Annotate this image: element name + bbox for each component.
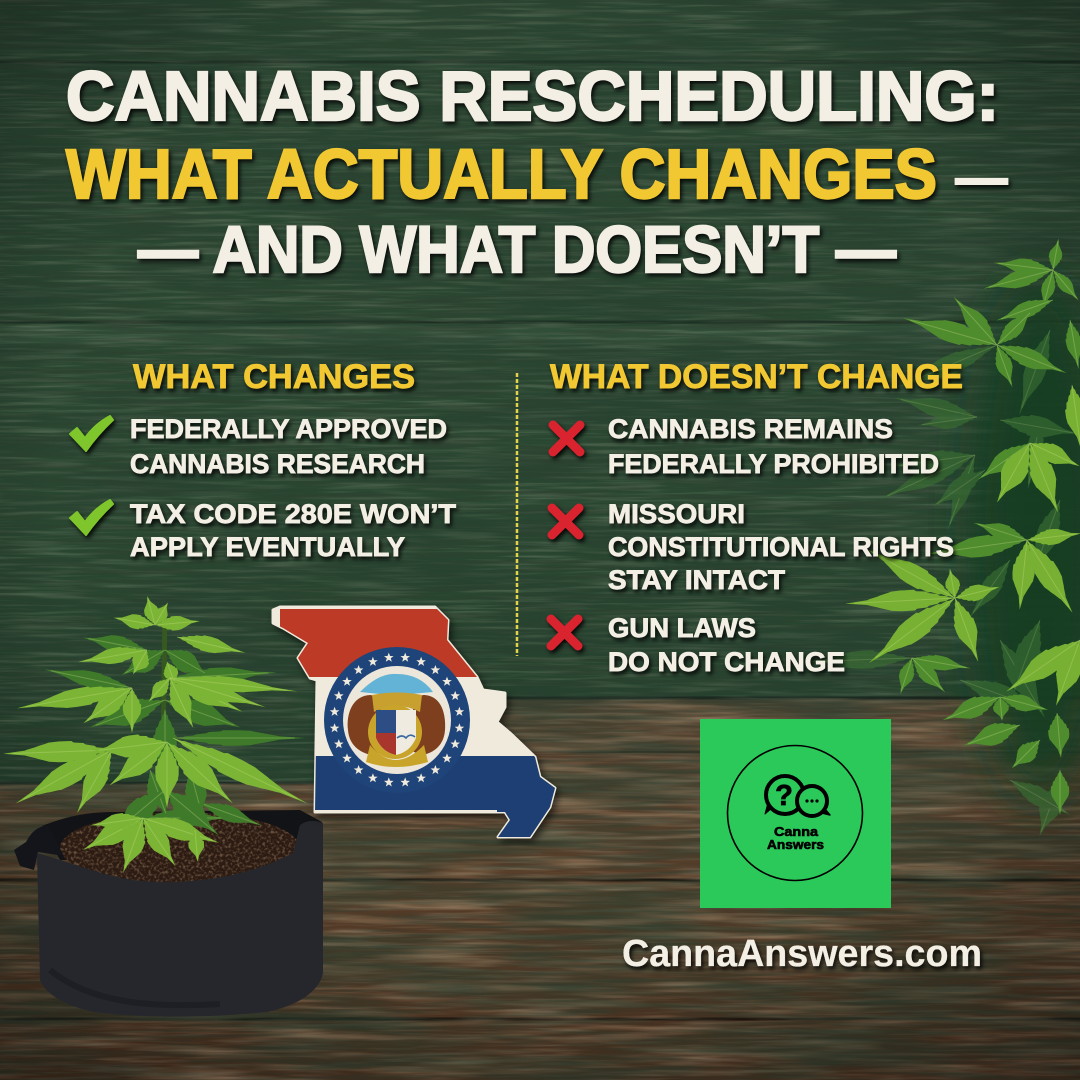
title bbox=[66, 57, 1008, 286]
check icon 1 bbox=[70, 416, 113, 451]
title: — AND WHAT DOESN’T — bbox=[138, 212, 896, 286]
item: research: FEDERALLY APPROVED bbox=[130, 414, 447, 444]
panel: what changes bbox=[70, 358, 457, 562]
item: Missouri: STAY INTACT bbox=[608, 565, 786, 595]
x icon 3 bbox=[551, 619, 578, 646]
check icon 2 bbox=[70, 500, 113, 535]
item: gun laws bbox=[608, 613, 845, 677]
grow bag back rim and soil bbox=[42, 810, 322, 884]
divider bbox=[516, 373, 518, 656]
item: prohibited bbox=[608, 414, 939, 479]
back leaves bbox=[42, 629, 305, 844]
upper leaves bbox=[893, 237, 1080, 815]
Missouri flag map bbox=[270, 607, 570, 838]
item: Missouri: CONSTITUTIONAL RIGHTS bbox=[608, 532, 954, 562]
plant stem bbox=[163, 605, 165, 850]
icon: speech bubbles bbox=[765, 776, 830, 816]
title: — bbox=[955, 143, 1008, 212]
item: gun laws: DO NOT CHANGE bbox=[608, 647, 845, 677]
title: WHAT ACTUALLY CHANGES bbox=[66, 135, 937, 213]
panel: what doesn't change bbox=[550, 358, 963, 677]
x icon 2 bbox=[552, 508, 579, 535]
logo: Canna Answers bbox=[700, 719, 891, 908]
logo: Canna Answers: Canna bbox=[774, 825, 819, 839]
title: CANNABIS RESCHEDULING: bbox=[66, 57, 999, 135]
bright leaves bbox=[3, 594, 312, 876]
x icon 1 bbox=[553, 425, 580, 452]
grow bag front bbox=[14, 821, 323, 1017]
right cannabis plant bbox=[807, 237, 1080, 840]
item: research: CANNABIS RESEARCH bbox=[130, 449, 425, 479]
dim background leaves bbox=[807, 326, 1080, 840]
item: prohibited: FEDERALLY PROHIBITED bbox=[608, 449, 939, 479]
item: gun laws: GUN LAWS bbox=[608, 613, 756, 643]
website: CannaAnswers.com bbox=[622, 933, 982, 975]
item: 280E: TAX CODE 280E WON’T bbox=[130, 499, 457, 529]
left potted plant bbox=[3, 594, 323, 1017]
item: Missouri bbox=[608, 499, 954, 595]
item: 280E: APPLY EVENTUALLY bbox=[130, 532, 405, 562]
logo: Canna Answers: ? bbox=[775, 780, 793, 812]
heading: what doesn't change: WHAT DOESN’T CHANGE bbox=[550, 358, 963, 396]
state seal bbox=[324, 647, 470, 793]
item: Missouri: MISSOURI bbox=[608, 499, 745, 529]
item: research bbox=[130, 414, 447, 479]
item: 280E bbox=[130, 499, 457, 562]
logo: Canna Answers: Answers bbox=[767, 838, 824, 852]
flag stripes bbox=[270, 609, 570, 838]
heading: what changes: WHAT CHANGES bbox=[133, 358, 415, 396]
bright foreground leaves bbox=[845, 384, 1080, 710]
item: prohibited: CANNABIS REMAINS bbox=[608, 414, 893, 444]
